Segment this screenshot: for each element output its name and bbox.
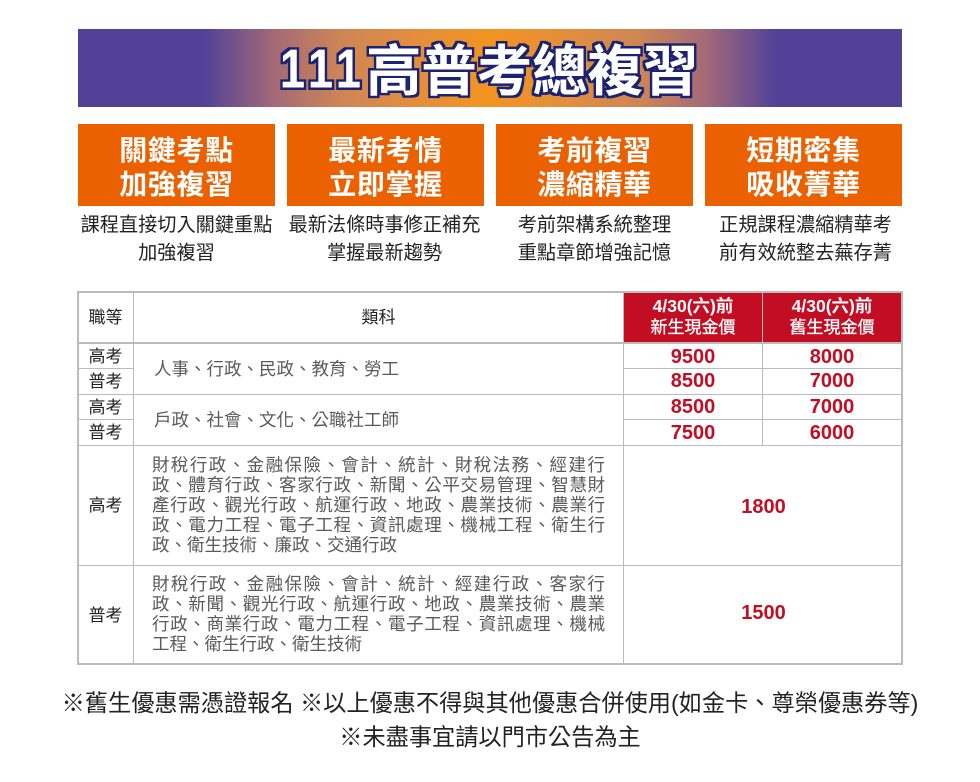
panel: 短期密集: 短期密集 [746, 135, 861, 166]
header: 新生現金價: 新生現金價 [650, 318, 736, 337]
column heading: 職等: 職等 [88, 308, 122, 327]
title text: 高普考總複習 [366, 40, 698, 102]
price 6000: 6000 [810, 422, 854, 444]
subjects 普考 list: 工程、衛生行政、衛生技術 [152, 634, 362, 654]
description 3: 重點章節增強記憶 [518, 243, 671, 264]
panel: 最新考情: 最新考情 [328, 135, 443, 166]
subjects 普考 list: 行政、商業行政、電力工程、電子工程、資訊處理、機械 [152, 614, 606, 634]
price 7000: 7000 [810, 370, 854, 392]
subjects row 1: 人事、行政、民政、教育、勞工 [154, 359, 399, 379]
grade label: 普考 [88, 606, 122, 625]
grade label: 高考 [88, 398, 122, 417]
subjects 高考 list: 政、衛生技術、廉政、交通行政 [152, 535, 397, 555]
header: 舊生現金價: 4/30(六)前 [792, 296, 872, 316]
description 4 [719, 214, 892, 264]
subjects 普考 list: 財稅行政、金融保險、會計、統計、經建行政、客家行 [152, 574, 606, 594]
price 1500: 1500 [741, 602, 786, 624]
panel: 最新考情: 立即掌握 [328, 169, 443, 200]
description 2 [289, 214, 480, 264]
price 7000: 7000 [810, 396, 854, 418]
price 7500: 7500 [671, 422, 715, 444]
description 2: 最新法條時事修正補充 [289, 215, 480, 236]
description 4: 前有效統整去蕪存菁 [719, 243, 892, 264]
header: 新生現金價 [624, 292, 762, 342]
description 1: 課程直接切入關鍵重點 [81, 215, 272, 236]
grade label: 普考 [88, 423, 122, 442]
price 9500: 9500 [671, 346, 715, 368]
footnote: ※未盡事宜請以門市公告為主 [339, 724, 641, 750]
subjects 普考 list: 政、新聞、觀光行政、航運行政、地政、農業技術、農業 [152, 594, 606, 614]
grade label: 高考 [88, 347, 122, 366]
grade label: 高考 [88, 496, 122, 515]
header: 新生現金價: 4/30(六)前 [653, 296, 733, 316]
grade label: 普考 [88, 372, 122, 391]
price 8000: 8000 [810, 346, 854, 368]
footnote: ※舊生優惠需憑證報名 ※以上優惠不得與其他優惠合併使用(如金卡、尊榮優惠券等) [62, 690, 918, 716]
panel: 關鍵考點: 關鍵考點 [119, 135, 234, 166]
price 8500: 8500 [671, 396, 715, 418]
subjects 高考 list: 政、電力工程、電子工程、資訊處理、機械工程、衛生行 [152, 515, 606, 535]
title banner [78, 29, 902, 107]
subjects 高考 list [152, 455, 606, 555]
column heading: 類科: 類科 [362, 308, 396, 327]
description 2: 掌握最新趨勢 [327, 243, 442, 264]
panel: 短期密集 [705, 124, 902, 206]
header: 舊生現金價 [763, 292, 901, 342]
description 3: 考前架構系統整理 [518, 215, 671, 236]
panel: 關鍵考點 [78, 124, 275, 206]
description 4: 正規課程濃縮精華考 [719, 215, 892, 236]
description 1: 加強複習 [138, 243, 215, 264]
header: 舊生現金價: 舊生現金價 [790, 318, 874, 337]
footnote [62, 690, 918, 750]
description 1 [81, 214, 272, 264]
panel: 考前複習: 濃縮精華 [537, 169, 652, 200]
title text: 111 [280, 38, 361, 100]
panel: 最新考情 [287, 124, 484, 206]
price 1800: 1800 [741, 496, 786, 518]
subjects 高考 list: 政、體育行政、客家行政、新聞、公平交易管理、智慧財 [152, 475, 606, 495]
description 3 [518, 214, 671, 264]
panel: 短期密集: 吸收菁華 [746, 169, 861, 200]
panel: 關鍵考點: 加強複習 [119, 169, 234, 200]
subjects row 2: 戶政、社會、文化、公職社工師 [154, 410, 399, 430]
panel: 考前複習: 考前複習 [537, 135, 652, 166]
subjects 高考 list: 財稅行政、金融保險、會計、統計、財稅法務、經建行 [152, 455, 606, 475]
subjects 普考 list [152, 574, 606, 654]
panel: 考前複習 [496, 124, 693, 206]
price 8500: 8500 [671, 370, 715, 392]
subjects 高考 list: 產行政、觀光行政、航運行政、地政、農業技術、農業行 [152, 495, 606, 515]
